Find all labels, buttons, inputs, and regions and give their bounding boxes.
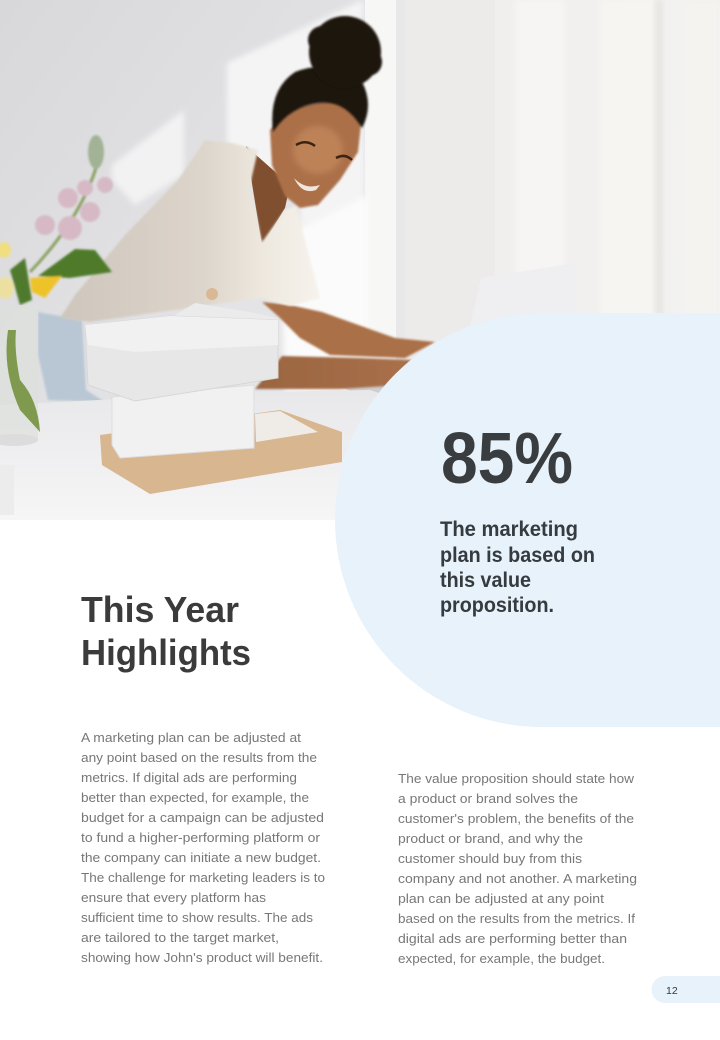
hair bun <box>308 16 382 88</box>
blue rounded highlight panel <box>335 313 720 727</box>
white box upper <box>85 288 278 401</box>
title <box>81 589 251 673</box>
neck <box>246 146 290 246</box>
eyes and smile <box>294 142 352 191</box>
right body text: digital ads are performing better than <box>398 932 627 946</box>
left body text: are tailored to the target market, <box>81 931 279 945</box>
left body text <box>81 731 325 965</box>
right body text: a product or brand solves the <box>398 792 578 806</box>
left body text: any point based on the results from the <box>81 751 317 765</box>
pink blossoms <box>35 177 113 240</box>
stat caption: proposition. <box>440 594 554 617</box>
white box lower <box>112 385 254 458</box>
upper arm <box>262 302 435 358</box>
left body text: showing how John's product will benefit. <box>81 951 323 965</box>
left body text: to fund a higher-performing platform or <box>81 831 320 845</box>
stems <box>30 165 97 272</box>
photo: woman packing boxes at a desk <box>0 0 720 520</box>
flowers <box>0 135 113 305</box>
right body text <box>398 772 637 966</box>
hair <box>272 67 368 132</box>
page number tab: 12 <box>666 985 678 997</box>
stat caption: The marketing <box>440 518 578 541</box>
right body text: plan can be adjusted at any point <box>398 892 605 906</box>
left body text: budget for a campaign can be adjusted <box>81 811 324 825</box>
yellow petals <box>30 276 62 298</box>
left body text: The challenge for marketing leaders is to <box>81 871 325 885</box>
title: Highlights <box>81 632 251 673</box>
right body text: company and not another. A marketing <box>398 872 637 886</box>
face highlight <box>293 126 343 174</box>
right body text: customer should buy from this <box>398 852 582 866</box>
stat caption: plan is based on <box>440 544 595 567</box>
sunlight patches on wall <box>112 0 368 395</box>
cup on table <box>0 491 14 515</box>
right body text: customer's problem, the benefits of the <box>398 812 634 826</box>
glass vase <box>0 305 40 446</box>
jeans <box>38 312 105 402</box>
right body text: based on the results from the metrics. If <box>398 912 636 926</box>
left body text: ensure that every platform has <box>81 891 266 905</box>
stat caption: this value <box>440 569 531 592</box>
wall background <box>0 0 365 405</box>
left body text: A marketing plan can be adjusted at <box>81 731 302 745</box>
kraft box <box>100 410 342 494</box>
right body text: The value proposition should state how <box>398 772 635 786</box>
woman <box>60 16 435 389</box>
green leaf <box>38 249 112 278</box>
left body text: metrics. If digital ads are performing <box>81 771 297 785</box>
face <box>270 98 362 208</box>
stat caption <box>440 518 595 617</box>
left body text: better than expected, for example, the <box>81 791 309 805</box>
curtains on the right <box>365 0 720 360</box>
title: This Year <box>81 589 239 630</box>
stat: 85%: 85% <box>441 419 573 499</box>
left body text: sufficient time to show results. The ads <box>81 911 313 925</box>
left body text: the company can initiate a new budget. <box>81 851 321 865</box>
table <box>0 390 400 520</box>
shirt <box>60 140 320 322</box>
lower arm <box>255 356 412 389</box>
right body text: expected, for example, the budget. <box>398 952 605 966</box>
right body text: product or brand, and why the <box>398 832 583 846</box>
green buds <box>88 135 104 169</box>
laptop <box>344 385 384 393</box>
page number tab <box>652 976 720 1003</box>
